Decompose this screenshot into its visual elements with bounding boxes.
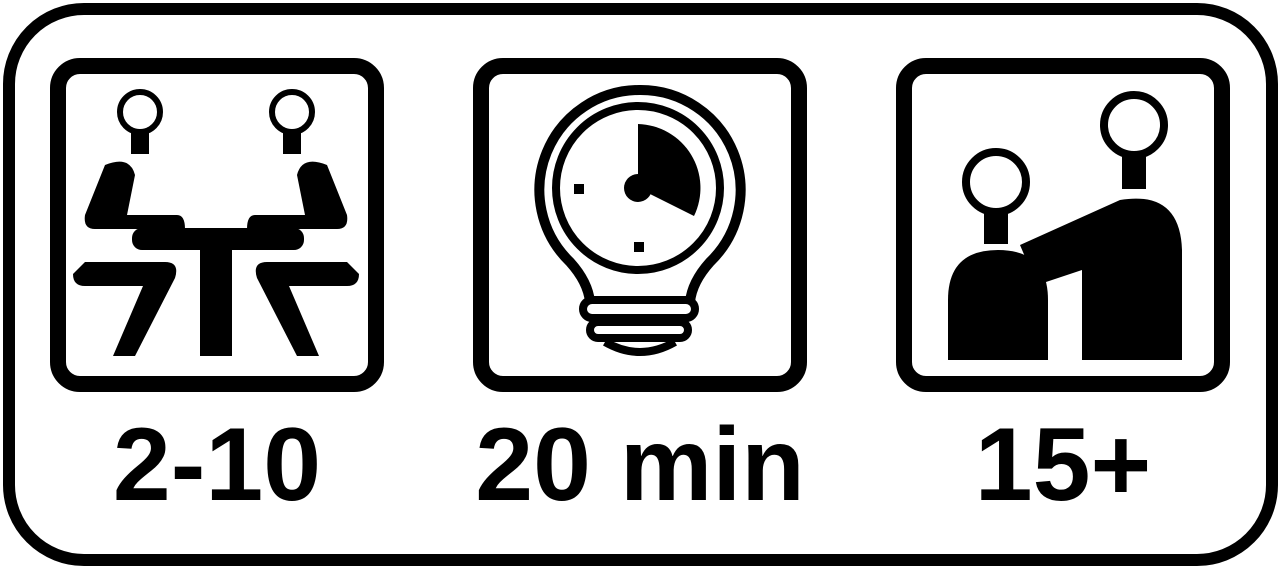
icon: bulb clock	[539, 90, 741, 352]
label: players: 2-10	[113, 407, 321, 523]
label: age: 15+	[975, 407, 1151, 523]
icon: two people at table	[73, 92, 359, 356]
panel: time	[481, 66, 799, 384]
icon: adult and child	[948, 95, 1182, 360]
panel: players	[58, 66, 376, 384]
panel: age	[904, 66, 1222, 384]
label: time: 20 min	[475, 407, 805, 523]
